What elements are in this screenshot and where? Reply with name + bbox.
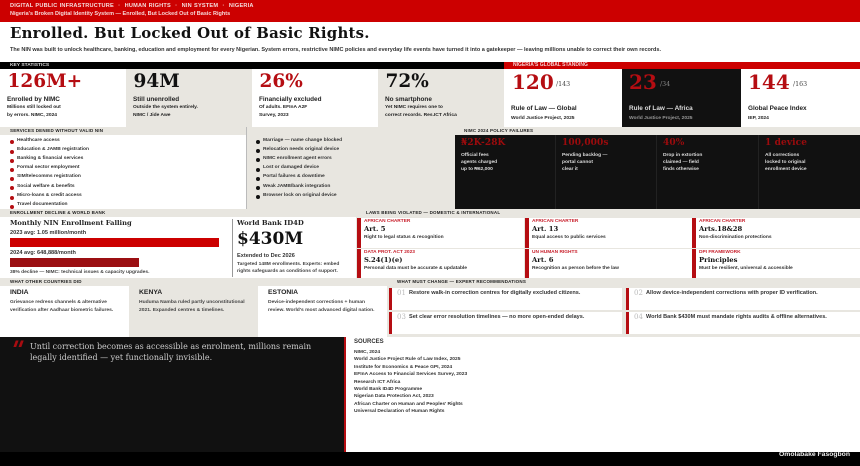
country: Kenya: KENYA [139,289,162,296]
stat: 72%: 72% [386,70,429,92]
stat: 26%: Survey, 2023 [259,112,289,118]
law: DPI principles: DPI FRAMEWORK [699,250,741,254]
panel: services denied: Social welfare & benefits [17,184,75,188]
sources list: EFInA Access to Financial Services Survey, 2023 [354,372,467,377]
sources list: Institute for Economics & Peace GPI, 2024 [354,365,452,370]
rank: global peace index: /163 [793,81,807,88]
panel: policy failures: locked to original [765,160,806,165]
rank: rule of law africa [622,69,741,127]
rank: rule of law global: /143 [556,81,570,88]
panel: policy failures: clear it [562,167,578,172]
panel: why records unusable: Marriage — name change blocked [263,138,342,142]
key statistics header: KEY STATISTICS [10,63,49,68]
law: Art 13 [525,218,692,248]
stat: 126M+ [0,69,126,127]
global standing header: NIGERIA'S GLOBAL STANDING [513,62,588,68]
law: UN Art 6: Recognition as person before the law [532,266,619,271]
law: DPI principles: Must be resilient, universal & accessible [699,266,793,271]
country: Estonia: review. World's most advanced digital nation. [268,308,375,313]
heading: countries: WHAT OTHER COUNTRIES DID [10,279,82,284]
panel: services denied: Healthcare access [17,138,60,142]
divider [232,219,233,277]
quote mark: " [5,334,28,364]
heading: laws: LAWS BEING VIOLATED — DOMESTIC & INTERNATIONAL [366,210,500,215]
panel: quote [0,337,346,452]
recommendation 02 [626,288,860,310]
panel: why records unusable: Browser lock on original device [263,193,337,198]
country: Estonia [258,286,387,337]
failure: backlog: 100,000s [562,138,609,148]
law: Art 13: Equal access to public services [532,235,606,240]
country: Estonia: ESTONIA [268,289,298,296]
stat: 126M+: by errors. NIMC, 2024 [7,112,57,118]
recommendation 02: Allow device-independent corrections with proper ID verification. [646,290,818,296]
stat: 26%: Financially excluded [259,96,322,103]
country: India: Grievance redress channels & alternative [10,300,107,305]
stat: 72% [378,69,504,127]
stat: 94M [126,69,252,127]
recommendation 04: 04 [634,312,643,320]
stat: 94M: Outside the system entirely. [133,105,198,110]
law: Arts 18 & 28 [692,218,860,248]
failure: device lock: 1 device [765,138,807,148]
country: India: verification after Aadhaar biometric failures. [10,308,113,313]
country: Estonia: Device-independent corrections + human [268,300,365,305]
header area [0,22,860,62]
law: S.24: S.24(1)(e) [364,256,402,264]
recommendation 04 [626,312,860,334]
panel: policy failures: Drop in extortion [663,152,702,158]
banner tags: DIGITAL PUBLIC INFRASTRUCTURE · HUMAN RIGHTS · NIN SYSTEM · NIGERIA [10,2,254,8]
heading: enrollment: ENROLLMENT DECLINE & WORLD BANK [10,210,105,215]
stat: 72%: correct records. Res.ICT Africa [385,112,457,118]
panel: policy failures: Pending backlog — [562,152,607,158]
recommendation 01: Restore walk-in correction centres for digitally excluded citizens. [409,290,580,296]
country: India: INDIA [10,289,29,296]
law: UN Art 6: UN HUMAN RIGHTS [532,250,578,254]
key statistics header [0,62,504,69]
stat: 26%: 26% [260,70,303,92]
label 2023: 2023 avg: 1.05 million/month [10,230,86,236]
rank: rule of law global: World Justice Project, 2025 [511,116,575,120]
sources list: Nigerian Data Protection Act, 2023 [354,394,434,399]
heading: recommendations: WHAT MUST CHANGE — EXPERT RECOMMENDATIONS [397,279,526,284]
world bank note: rights safeguards as conditions of support. [237,269,338,274]
rank: rule of law global [504,69,622,127]
panel: policy failures: All corrections [765,152,799,158]
law: S.24: Personal data must be accurate & updatable [364,266,467,271]
banner subtitle: Nigeria's Broken Digital Identity System — Enrolled, But Locked Out of Basic Rights [10,11,230,17]
law: Art 5: Right to legal status & recognition [364,235,444,240]
quote text [30,342,311,362]
world bank note: Targeted 148M enrollments. Experts: embed [237,262,339,266]
chart note: 38% decline — NIMC: technical issues & capacity upgrades. [10,270,149,274]
panel: why records unusable: Relocation needs original device [263,147,339,152]
panel: policy failures [455,135,860,209]
panel: services denied [0,135,246,209]
panel: services denied: Formal sector employment [17,165,80,170]
recommendation 03: 03 [397,312,406,320]
panel: why records unusable: Lost or damaged device [263,165,319,170]
law: Arts 18 & 28: AFRICAN CHARTER [699,218,745,224]
law: Arts 18 & 28: Arts.18&28 [699,225,742,233]
world bank extension: Extended to Dec 2026 [237,252,295,258]
panel: policy failures: up to ₦62,000 [461,167,493,172]
failure: fees: ₦2K-28K [461,138,505,148]
law: Art 5: AFRICAN CHARTER [364,218,410,224]
panel: policy failures: portal cannot [562,160,593,165]
quote text: Until correction becomes as accessible as enrolment, millions remain [30,342,311,350]
law: Art 13: Art. 13 [532,225,558,233]
country: Kenya: Huduma Namba ruled partly unconstitutional [139,300,245,305]
rank: rule of law global: 120 [512,70,554,94]
law: Arts 18 & 28: Non-discrimination protections [699,235,772,240]
law: DPI principles [692,248,860,278]
sources list: World Bank ID4D Programme [354,387,422,392]
law: Art 5: Art. 5 [364,225,385,233]
rank: rule of law africa: 23 [629,70,657,94]
law: Art 13: AFRICAN CHARTER [532,218,578,224]
quote text: legally identified — yet functionally invisible. [30,353,212,362]
law: DPI principles: Principles [699,256,737,264]
world bank figure: $430M [237,228,303,248]
panel: services denied: Micro-loans & credit access [17,193,82,198]
sources list: Universal Declaration of Human Rights [354,409,444,414]
recommendation 04: World Bank $430M must mandate rights audits & offline alternatives. [646,314,827,320]
law: S.24 [357,248,524,278]
sources heading: SOURCES [354,339,384,345]
stat: 94M: Still unenrolled [133,96,179,103]
stat: 126M+: Enrolled by NIMC [7,96,60,103]
panel: services denied: Education & JAMB registration [17,147,89,152]
global standing header [504,62,860,69]
stat: 26%: Of adults. EFInA A2F [259,105,307,110]
sources list: NIMC, 2024 [354,350,380,355]
panel: policy failures: claimed — field [663,160,699,165]
panel: policy failures: enrollment device [765,167,807,172]
sources list: World Justice Project Rule of Law Index, 2025 [354,357,460,362]
rank: rule of law africa: Rule of Law — Africa [629,104,693,112]
rank: rule of law global: Rule of Law — Global [511,104,577,112]
bar 2024 [10,258,139,267]
panel: policy failures: Official fees [461,152,489,158]
title: Enrolled. But Locked Out of Basic Rights. [10,24,370,42]
stat: 94M: 94M [134,70,180,92]
panel: why records unusable: Portal failures & downtime [263,174,325,179]
world bank title: World Bank ID4D [237,219,304,227]
rank: global peace index [741,69,860,127]
label 2024: 2024 avg: 648,888/month [10,250,76,256]
top banner [0,0,860,22]
panel: sources [346,337,860,452]
bar 2023 [10,238,219,247]
rank: rule of law africa: /34 [660,81,670,88]
country: Kenya: 2021. Expanded centres & timelines. [139,308,224,313]
rank: rule of law africa: World Justice Project, 2025 [629,116,693,120]
sources list: Research ICT Africa [354,380,400,385]
rank: global peace index: Global Peace Index [748,104,807,112]
country: Kenya [129,286,258,337]
chart title: Monthly NIN Enrollment Falling [10,219,132,227]
panel: services denied: Travel documentation [17,202,68,207]
stat: 94M: NIMC / Jide Awe [133,112,171,118]
stat: 126M+: 126M+ [8,70,82,92]
panel: services denied: SIM/telecomms registration [17,174,81,179]
sources list: African Charter on Human and Peoples' Rights [354,402,463,407]
failure: extortion: 40% [663,138,684,148]
panel: why records unusable: Weak JAMB/bank integration [263,184,330,188]
recommendation 03: Set clear error resolution timelines — no more open-ended delays. [409,314,584,320]
sources list [354,338,467,414]
panel: why records unusable: NIMC enrollment agent errors [263,156,332,161]
panel: enrollment chart [0,217,356,278]
world bank note [237,262,340,274]
law: S.24: DATA PROT. ACT 2023 [364,250,415,254]
recommendation 03 [389,312,622,334]
law: UN Art 6: Art. 6 [532,256,553,264]
rank: global peace index: IEP, 2024 [748,116,769,120]
stat: 72%: No smartphone [385,96,432,103]
panel: policy failures: agents charged [461,160,497,165]
recommendation 02: 02 [634,288,643,296]
country: India [0,286,129,337]
stat: 26% [252,69,378,127]
heading: policy failures: NIMC 2024 POLICY FAILURES [464,128,533,133]
panel: why records unusable [246,127,455,209]
heading: why records: WHY RECORDS BECOME UNUSABLE [255,128,342,133]
heading: services: SERVICES DENIED WITHOUT VALID NIN [10,128,103,133]
recommendation 01: 01 [397,288,406,296]
rank: global peace index: 144 [748,70,790,94]
footer bar [0,452,860,466]
panel: services denied: Banking & financial services [17,156,83,161]
recommendation 01 [389,288,622,310]
intro text: The NIN was built to unlock healthcare, banking, education and employment for every Nigerian. System errors, restrictive NIMC policies and everyday life events have turned it into a gatekeeper — leaving millions unable to correct their own records. [10,46,661,52]
stat: 72%: Yet NIMC requires one to [385,105,443,110]
law: UN Art 6 [525,248,692,278]
law: Art 5 [357,218,524,248]
panel: policy failures: finds otherwise [663,167,699,172]
stat: 126M+: Millions still locked out [7,105,61,110]
